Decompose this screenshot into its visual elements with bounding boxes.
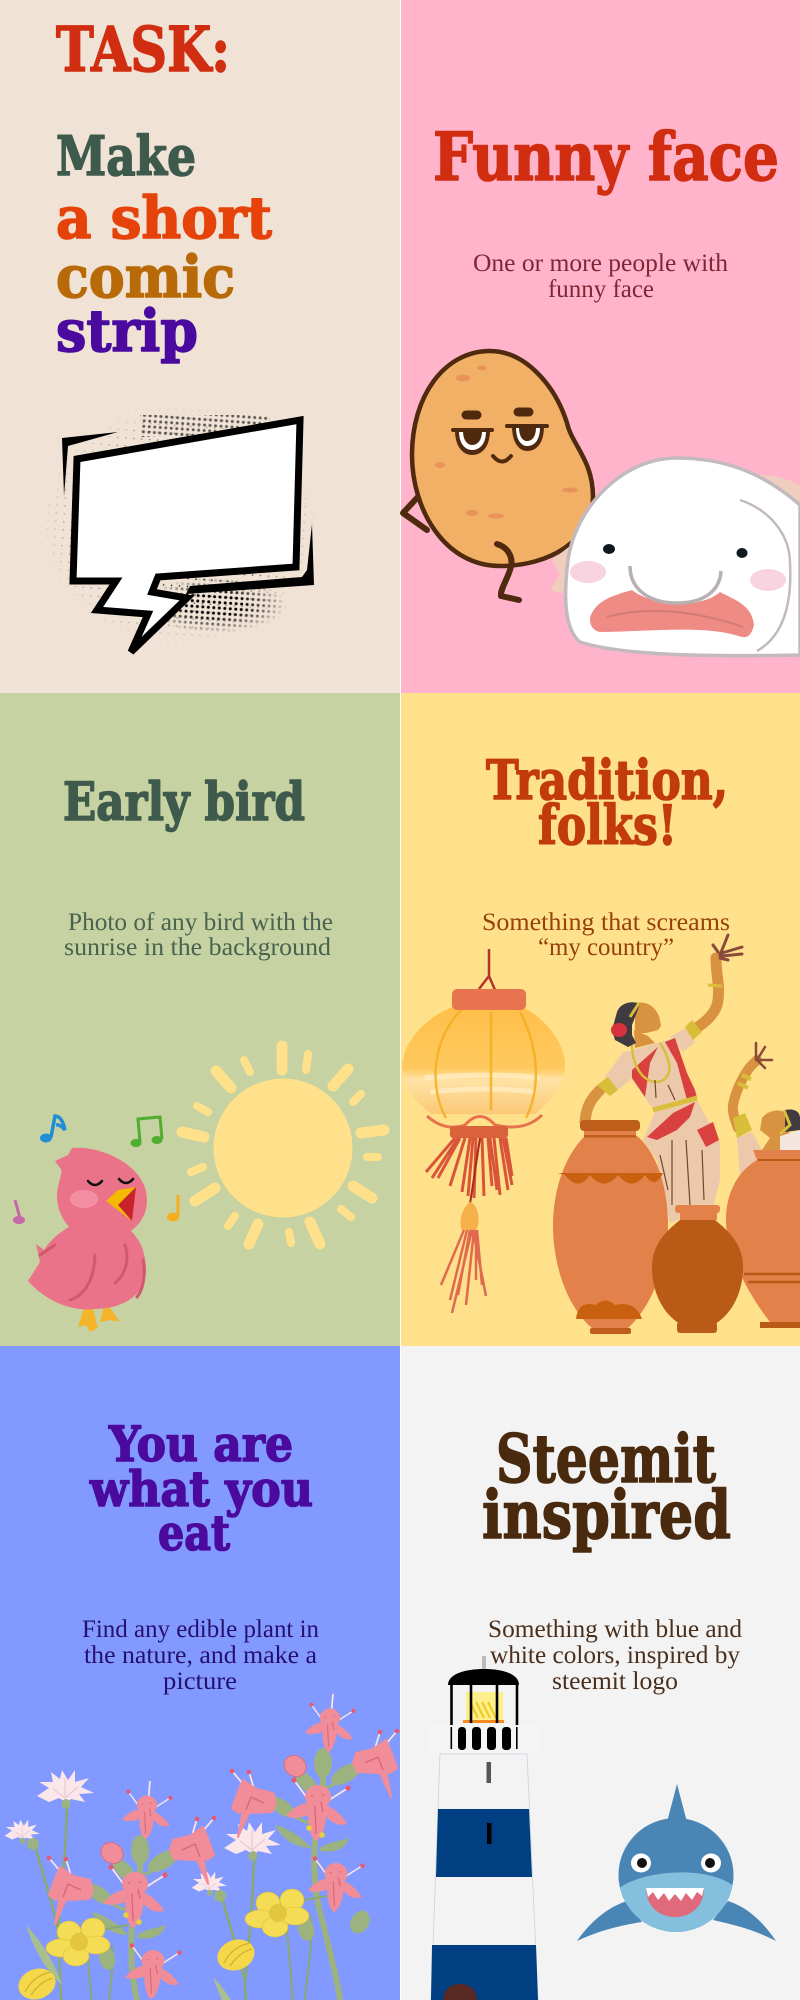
heading: steemit inspired [482, 1420, 731, 1554]
panel: early bird [0, 693, 400, 1346]
description: early bird: Photo of any bird with the [68, 909, 333, 936]
description: edible plant: the nature, and make a [84, 1642, 317, 1669]
icon: sun [182, 1046, 384, 1244]
panel: funny face [401, 0, 800, 693]
description: early bird: sunrise in the background [64, 934, 332, 961]
panel: tradition [401, 693, 800, 1346]
panel: task intro [0, 0, 400, 693]
description: funny face: funny face [548, 276, 654, 303]
icon: blobfish [550, 458, 800, 656]
icon: terracotta pots [553, 1120, 800, 1334]
description: edible plant: picture [163, 1668, 237, 1695]
heading: you are what you eat [88, 1424, 312, 1552]
description: steemit: white colors, inspired by [490, 1642, 740, 1669]
description: edible plant: Find any edible plant in [82, 1616, 319, 1643]
heading: steemit inspired: inspired [482, 1476, 731, 1554]
icon: lighthouse [428, 1656, 538, 2000]
description: tradition [482, 909, 730, 961]
icon: shark [577, 1784, 776, 1941]
heading: you are what you eat: eat [158, 1504, 230, 1562]
icon: music notes [13, 1116, 179, 1224]
icon: potato character [403, 351, 593, 600]
heading: you are what you eat: what you [89, 1460, 313, 1518]
heading: early bird: Early bird [63, 772, 305, 833]
description: steemit: Something with blue and [488, 1616, 743, 1643]
heading: make a short comic strip: a short [56, 184, 272, 252]
heading: TASK: TASK: [56, 13, 230, 86]
description: steemit [488, 1616, 743, 1695]
heading: make a short comic strip: comic [56, 243, 235, 311]
description: tradition: Something that screams [482, 909, 730, 936]
icon: dancers [585, 935, 800, 1223]
panel: steemit inspired [401, 1346, 800, 2000]
description: early bird [64, 909, 333, 961]
icon: paper lantern [402, 949, 565, 1313]
description: edible plant [82, 1616, 319, 1695]
heading: make a short comic strip: strip [56, 297, 198, 365]
heading: tradition folks: folks! [538, 793, 677, 857]
description: steemit: steemit logo [552, 1668, 678, 1695]
icon: singing pink bird [28, 1148, 147, 1332]
heading: you are what you eat: You are [108, 1415, 293, 1473]
heading: steemit inspired: Steemit [496, 1420, 716, 1498]
icon: comic speech bubble with halftone [40, 403, 320, 652]
description: funny face: One or more people with [473, 250, 728, 277]
description: tradition: “my country” [538, 934, 674, 961]
heading: tradition folks [486, 756, 724, 846]
heading: make a short comic strip [56, 124, 272, 365]
description: funny face [473, 250, 728, 303]
heading: tradition folks: Tradition, [486, 748, 728, 812]
illustration: wildflowers [5, 1694, 399, 2000]
panel: you are what you eat [0, 1346, 400, 2000]
heading: make a short comic strip: Make [56, 124, 196, 188]
